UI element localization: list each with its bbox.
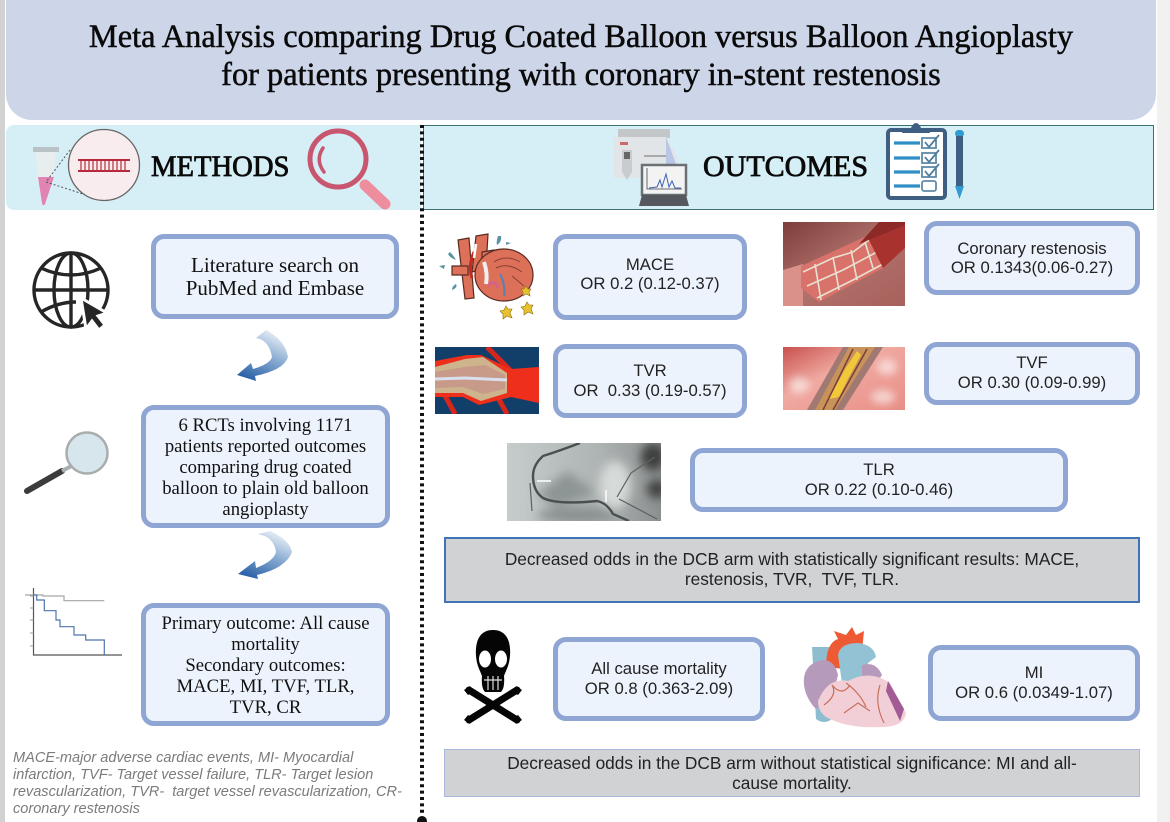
panel: outcomes header — [423, 125, 1154, 210]
image: coronary angiogram — [507, 443, 661, 521]
icon: clipboard checklist and pen — [886, 123, 964, 200]
abbreviations footnote — [13, 750, 402, 817]
image: failed vessel — [783, 347, 905, 410]
icon: globe with cursor — [32, 251, 110, 329]
result: TVF: OR 0.30 (0.09-0.99) — [958, 373, 1106, 392]
arrow: RCTs to outcomes — [238, 531, 292, 579]
result: all cause mortality: OR 0.8 (0.363-2.09) — [585, 679, 733, 698]
vertical dotted divider — [417, 125, 427, 822]
icon: red magnifying glass — [308, 128, 390, 210]
summary: non-significant results: cause mortality. — [732, 773, 852, 793]
image: stent in artery — [783, 222, 905, 306]
result: TVF — [924, 342, 1140, 405]
step: literature search — [151, 234, 399, 319]
result: coronary restenosis — [924, 221, 1140, 295]
abbreviations footnote: revascularization, TVR- target vessel revascularization, CR- — [13, 784, 402, 800]
step: included trials: patients reported outcomes — [165, 436, 366, 456]
step: study outcomes: Primary outcome: All cause — [161, 612, 370, 634]
title banner — [6, 0, 1156, 120]
summary: significant results: Decreased odds in the DCB arm with statistically significant results: MACE, — [505, 549, 1079, 569]
abbreviations footnote: infarction, TVF- Target vessel failure, TLR- Target lesion — [13, 767, 373, 783]
arrow: search to RCTs — [237, 330, 288, 381]
result: MACE — [553, 234, 747, 320]
icon: anatomical heart — [804, 627, 906, 728]
step: study outcomes: TVR, CR — [230, 696, 301, 718]
result: TLR: TLR — [863, 460, 895, 478]
icon: damaged heart — [439, 233, 534, 320]
result: MI: OR 0.6 (0.0349-1.07) — [955, 682, 1113, 702]
result: TLR — [690, 448, 1068, 512]
step: included trials: comparing drug coated — [179, 456, 352, 478]
summary: significant results — [444, 537, 1140, 603]
result: all cause mortality — [553, 637, 765, 721]
heading: outcomes: OUTCOMES — [703, 150, 868, 183]
step: study outcomes: MACE, MI, TVF, TLR, — [176, 676, 354, 696]
icon: test tube with DNA magnified — [33, 128, 140, 206]
summary: non-significant results — [444, 749, 1140, 797]
abbreviations footnote: MACE-major adverse cardiac events, MI- Myocardial — [13, 750, 353, 766]
step: study outcomes: mortality — [231, 634, 300, 654]
result: TVF: TVF — [1016, 353, 1048, 372]
result: coronary restenosis: Coronary restenosis — [957, 238, 1107, 258]
result: MI — [928, 645, 1140, 721]
chart: survival curve — [25, 588, 122, 656]
panel: methods header — [6, 125, 421, 210]
step: included trials — [141, 405, 390, 528]
title banner: Meta Analysis comparing Drug Coated Balloon versus Balloon Angioplasty — [89, 19, 1073, 55]
step: included trials: balloon to plain old balloon — [162, 478, 369, 498]
icon: magnifying glass — [24, 431, 109, 494]
result: TLR: OR 0.22 (0.10-0.46) — [805, 480, 953, 498]
summary: non-significant results: Decreased odds in the DCB arm without statistical significance: MI and all- — [507, 753, 1077, 773]
abbreviations footnote: coronary restenosis — [13, 801, 140, 817]
step: included trials: 6 RCTs involving 1171 — [178, 414, 352, 436]
result: MACE: MACE — [626, 254, 674, 274]
title banner: for patients presenting with coronary in-stent restenosis — [221, 57, 941, 93]
result: TVR: TVR — [633, 360, 667, 380]
step: study outcomes — [141, 603, 390, 726]
step: study outcomes: Secondary outcomes: — [185, 654, 346, 676]
step: literature search: Literature search on — [191, 253, 359, 277]
step: included trials: angioplasty — [222, 498, 309, 520]
icon: skull and crossbones — [464, 630, 522, 724]
result: coronary restenosis: OR 0.1343(0.06-0.27) — [951, 258, 1113, 277]
step: literature search: PubMed and Embase — [186, 276, 364, 300]
result: TVR: OR 0.33 (0.19-0.57) — [573, 380, 727, 400]
result: all cause mortality: All cause mortality — [591, 659, 727, 678]
image: vessel revascularization — [435, 347, 539, 414]
heading: methods: METHODS — [151, 150, 289, 183]
result: MI: MI — [1025, 662, 1043, 682]
icon: lab instrument and laptop — [614, 129, 689, 206]
result: TVR — [553, 344, 747, 418]
summary: significant results: restenosis, TVR, TVF, TLR. — [685, 569, 899, 589]
result: MACE: OR 0.2 (0.12-0.37) — [580, 274, 720, 293]
